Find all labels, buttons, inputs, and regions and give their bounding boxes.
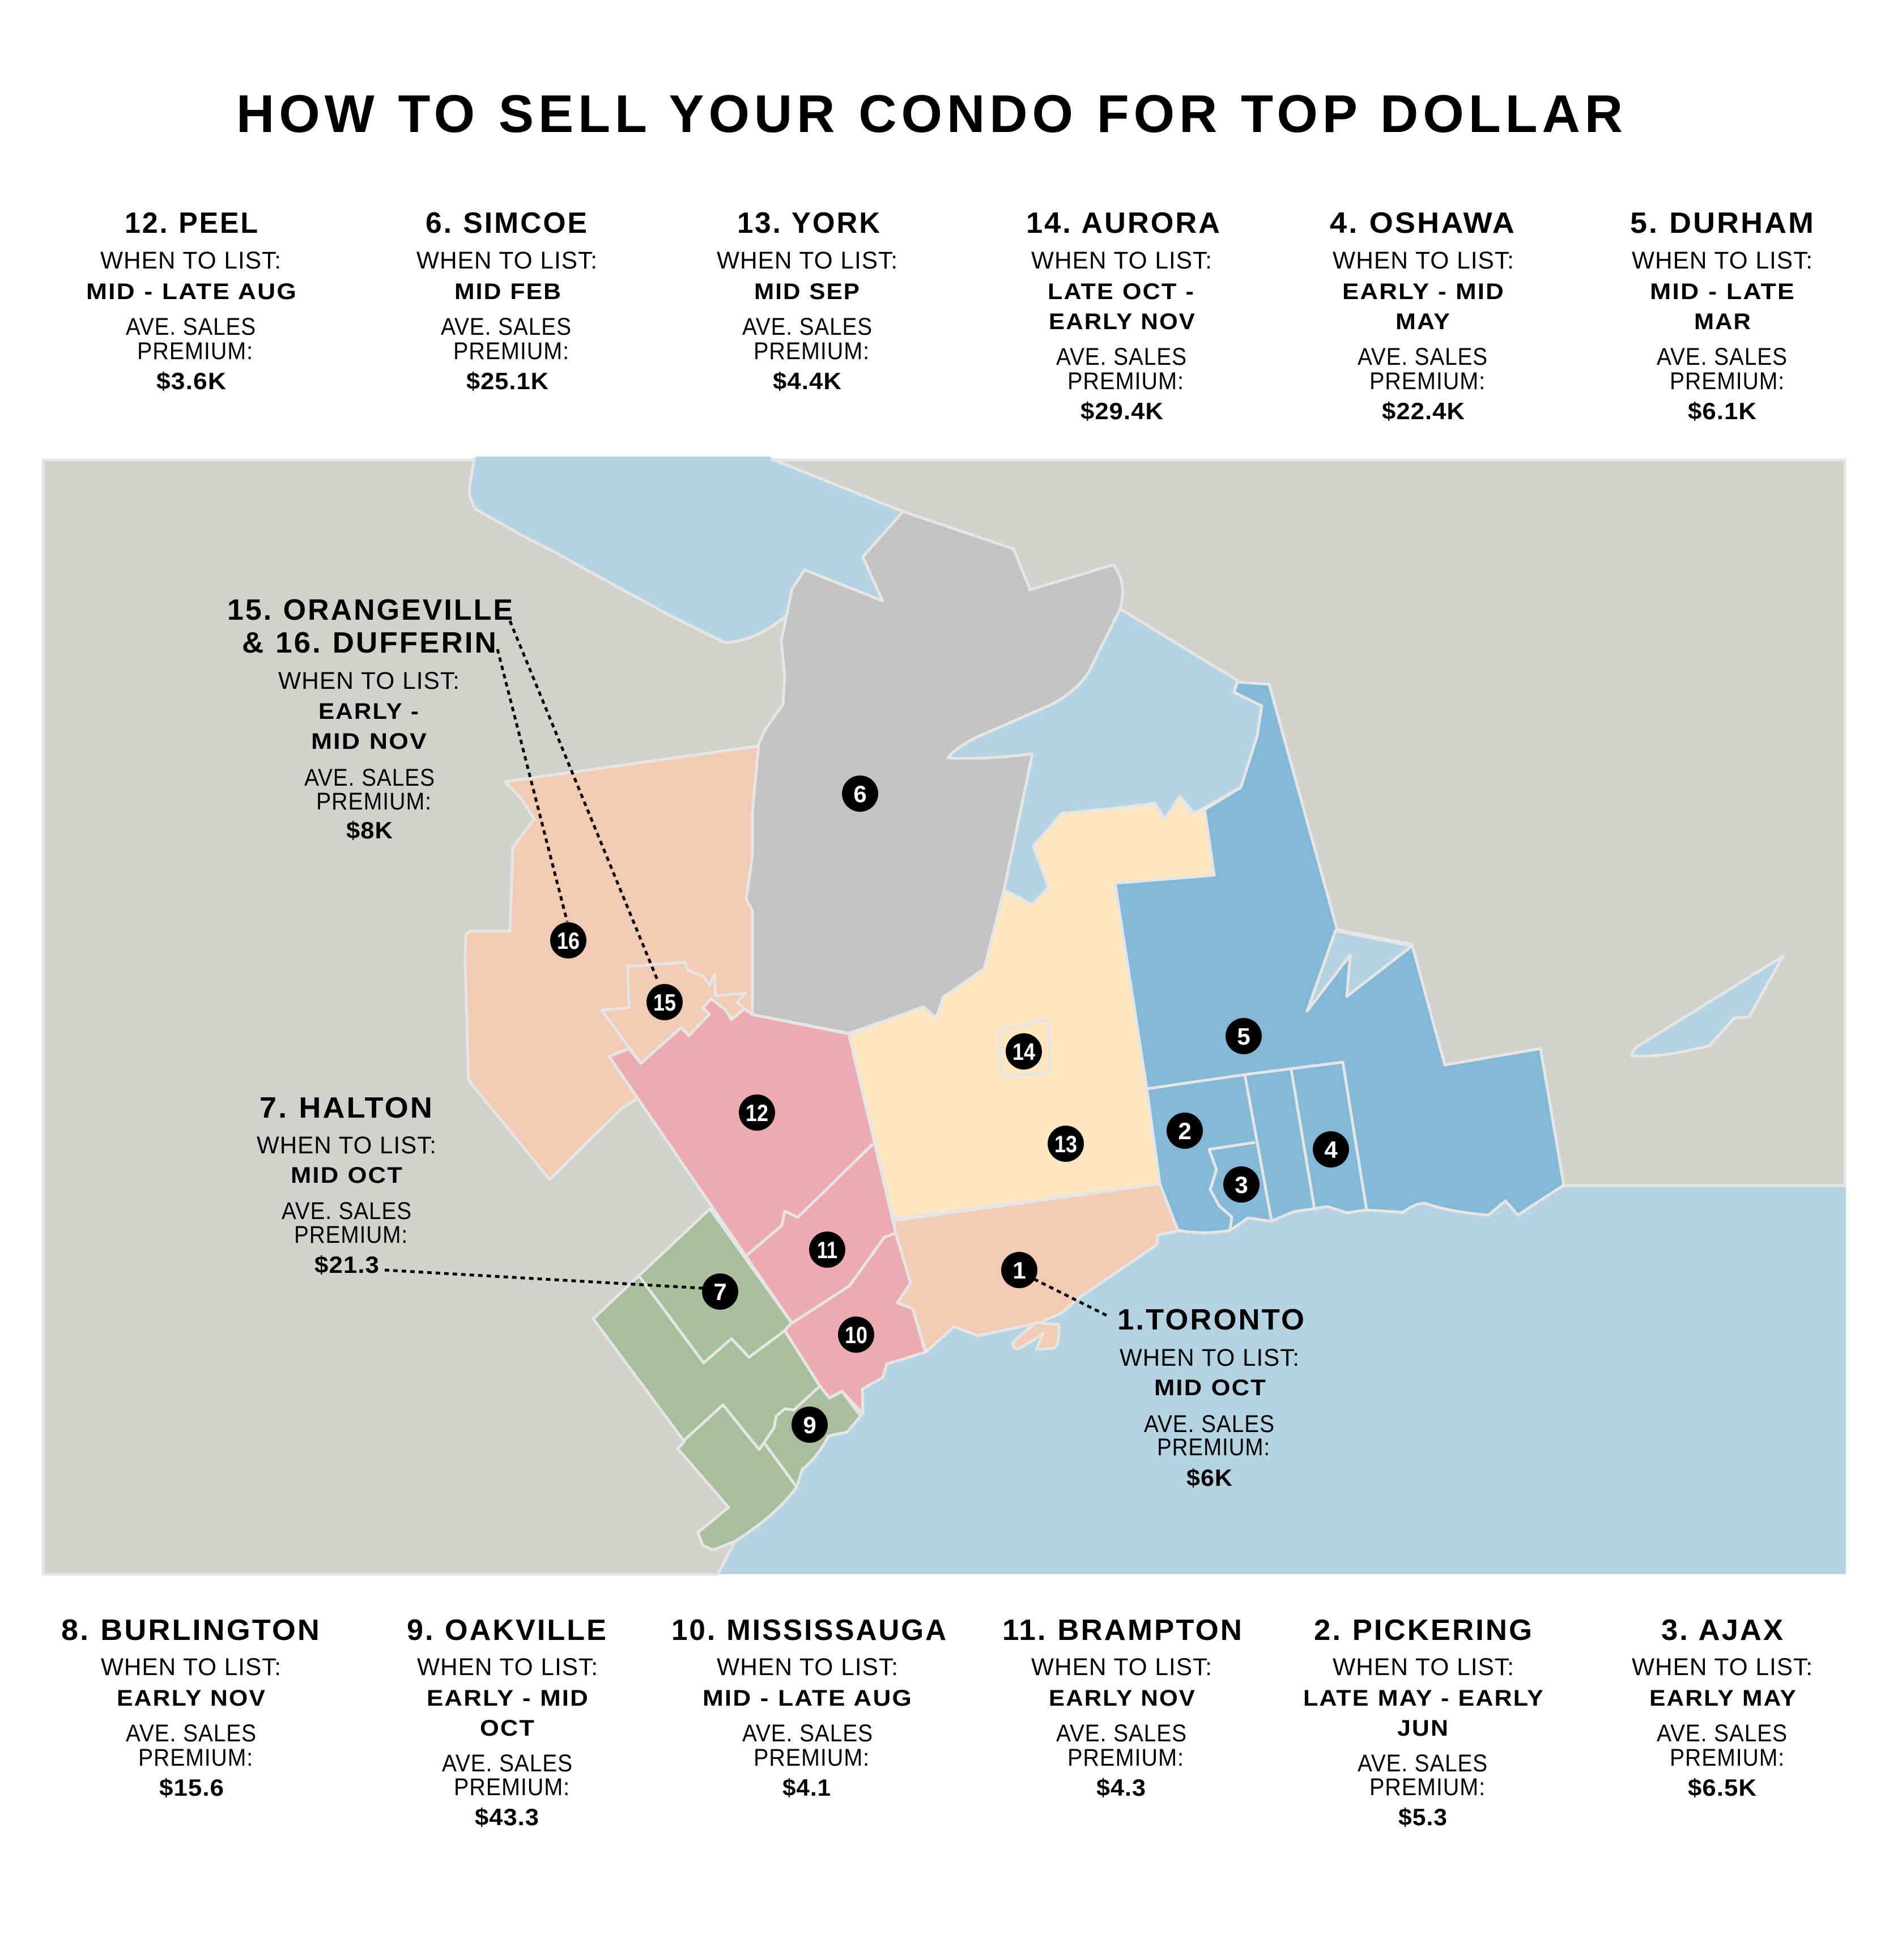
marker 6 [842, 776, 878, 812]
region: dufferin [465, 746, 759, 1179]
block: 10. mississauga: 10. MISSISSAUGA [671, 1614, 948, 1647]
title: HOW TO SELL YOUR CONDO FOR TOP DOLLAR [236, 84, 1627, 143]
block: 9. oakville: $43.3 [475, 1804, 539, 1830]
block: 10. mississauga: $4.1 [782, 1774, 831, 1801]
block: 2. pickering: LATE MAY - EARLY [1303, 1686, 1545, 1711]
map markers [550, 776, 1349, 1443]
callout: 1. toronto: 1.TORONTO [1117, 1303, 1306, 1336]
block: 11. brampton: PREMIUM: [1067, 1744, 1184, 1771]
block: 13. york: AVE. SALES [742, 313, 873, 340]
marker 5 [1226, 1018, 1262, 1054]
marker 10: 10 [845, 1322, 867, 1348]
callout: 7. halton: PREMIUM: [294, 1221, 408, 1249]
region: peel [609, 999, 925, 1414]
block: 2. pickering: $5.3 [1398, 1804, 1448, 1830]
leader line: halton [385, 1270, 703, 1288]
region: york [849, 796, 1214, 1219]
lake ontario water [42, 459, 1846, 1574]
municipal divisions in durham [1147, 1062, 1367, 1230]
block: 11. brampton: WHEN TO LIST: [1031, 1654, 1212, 1681]
block: 3. ajax: PREMIUM: [1670, 1744, 1785, 1771]
block: 6. simcoe: WHEN TO LIST: [416, 247, 598, 274]
block: 5. durham [1630, 207, 1815, 424]
callout: 7. halton: MID OCT [291, 1163, 403, 1188]
marker 7 [702, 1273, 738, 1310]
block: 12. peel [86, 207, 297, 394]
block: 3. ajax: 3. AJAX [1661, 1614, 1785, 1647]
callout: 15. orangeville and 16. dufferin: 15. ORANGEVILLE [227, 594, 514, 627]
marker 13: 13 [1054, 1131, 1077, 1157]
marker 2: 2 [1178, 1118, 1192, 1144]
marker 15: 15 [653, 989, 676, 1016]
block: 9. oakville [407, 1614, 608, 1830]
block: 4. oshawa: EARLY - MID [1342, 279, 1505, 304]
callout: 15. orangeville and 16. dufferin: & 16. DUFFERIN [242, 627, 498, 659]
peel divisions [746, 1145, 896, 1323]
block: 5. durham: WHEN TO LIST: [1632, 247, 1813, 274]
block: 8. burlington: WHEN TO LIST: [101, 1654, 282, 1681]
callout: 15. orangeville and 16. dufferin: EARLY - [318, 699, 420, 724]
marker 16 [550, 922, 586, 958]
block: 8. burlington: PREMIUM: [138, 1744, 253, 1771]
block: 4. oshawa: WHEN TO LIST: [1333, 247, 1514, 274]
block: 6. simcoe [416, 207, 598, 394]
region: aurora [999, 1020, 1050, 1077]
marker 4 [1313, 1131, 1349, 1168]
durham small lake [1307, 931, 1412, 1011]
halton divisions [640, 1277, 820, 1487]
callout: 1. toronto: MID OCT [1154, 1375, 1267, 1400]
georgian bay water [469, 459, 903, 642]
marker 3 [1223, 1166, 1260, 1203]
lake simcoe water [949, 609, 1262, 905]
region: durham [1115, 682, 1564, 1233]
block: 12. peel: 12. PEEL [125, 207, 259, 240]
callout: 1. toronto: AVE. SALES [1144, 1411, 1275, 1438]
block: 6. simcoe: 6. SIMCOE [426, 207, 589, 240]
block: 9. oakville: 9. OAKVILLE [407, 1614, 608, 1647]
surrounding land [43, 460, 1845, 1574]
marker 1 [1001, 1252, 1037, 1288]
block: 3. ajax: AVE. SALES [1657, 1720, 1788, 1747]
block: 14. aurora [1026, 207, 1222, 424]
block: 11. brampton: $4.3 [1096, 1774, 1146, 1801]
block: 14. aurora: EARLY NOV [1049, 309, 1196, 334]
leader line: orangeville [510, 621, 658, 982]
block: 12. peel: AVE. SALES [126, 313, 256, 340]
block: 6. simcoe: PREMIUM: [453, 338, 569, 365]
block: 12. peel: PREMIUM: [137, 338, 253, 365]
callout: 15. orangeville and 16. dufferin: WHEN TO LIST: [278, 667, 460, 694]
block: 2. pickering [1303, 1614, 1545, 1830]
block: 5. durham: AVE. SALES [1657, 343, 1788, 370]
georgian bay top edge mask [476, 457, 771, 461]
block: 8. burlington [61, 1614, 321, 1801]
callout: 7. halton: 7. HALTON [259, 1092, 434, 1124]
region: toronto [894, 1184, 1178, 1352]
callout: 7. halton: AVE. SALES [282, 1198, 412, 1225]
marker 9 [792, 1407, 828, 1443]
marker 13 [1048, 1126, 1084, 1162]
block: 8. burlington: 8. BURLINGTON [61, 1614, 321, 1647]
block: 5. durham: $6.1K [1688, 398, 1757, 424]
block: 10. mississauga: WHEN TO LIST: [717, 1654, 899, 1681]
block: 10. mississauga: AVE. SALES [742, 1720, 873, 1747]
marker 5: 5 [1237, 1023, 1250, 1050]
marker 11: 11 [817, 1237, 837, 1263]
block: 6. simcoe: $25.1K [466, 368, 549, 394]
marker 11 [809, 1232, 845, 1268]
block: 2. pickering: WHEN TO LIST: [1333, 1654, 1514, 1681]
block: 11. brampton: AVE. SALES [1056, 1720, 1187, 1747]
region: halton [593, 1209, 861, 1550]
block: 2. pickering: JUN [1397, 1716, 1449, 1741]
leader line: dufferin [497, 649, 567, 922]
block: 14. aurora: 14. AURORA [1026, 207, 1222, 240]
block: 5. durham: PREMIUM: [1670, 368, 1785, 395]
marker 9: 9 [803, 1412, 816, 1438]
block: 3. ajax: WHEN TO LIST: [1632, 1654, 1813, 1681]
callout: 15. orangeville and 16. dufferin: MID NOV [311, 729, 428, 754]
marker 16: 16 [557, 927, 580, 954]
callout: 1. toronto: PREMIUM: [1157, 1434, 1270, 1461]
toronto island [1012, 1323, 1059, 1349]
block: 11. brampton: EARLY NOV [1049, 1686, 1196, 1711]
block: 14. aurora: $29.4K [1080, 398, 1164, 424]
block: 9. oakville: EARLY - MID [427, 1686, 589, 1711]
block: 11. brampton: 11. BRAMPTON [1002, 1614, 1244, 1647]
block: 13. york: 13. YORK [737, 207, 882, 240]
block: 11. brampton [1002, 1614, 1244, 1801]
block: 12. peel: WHEN TO LIST: [100, 247, 282, 274]
block: 8. burlington: $15.6 [159, 1774, 224, 1801]
block: 6. simcoe: MID FEB [454, 279, 562, 304]
block: 5. durham: MID - LATE [1650, 279, 1796, 304]
orangeville boundary [602, 962, 746, 1063]
callout: 15. orangeville and 16. dufferin: AVE. SALES [304, 764, 435, 791]
block: 9. oakville: OCT [480, 1716, 535, 1741]
block: 13. york: MID SEP [754, 279, 861, 304]
marker 6: 6 [853, 781, 867, 807]
marker 7: 7 [713, 1279, 727, 1305]
callout: 7. halton: $21.3 [314, 1251, 380, 1278]
block: 14. aurora: AVE. SALES [1056, 343, 1187, 370]
durham east water [1632, 956, 1783, 1056]
leader line: toronto [1034, 1279, 1110, 1317]
marker 15 [646, 984, 683, 1020]
block: 2. pickering: AVE. SALES [1358, 1750, 1488, 1777]
block: 13. york: WHEN TO LIST: [717, 247, 898, 274]
block: 3. ajax [1632, 1614, 1813, 1801]
callout: 15. orangeville and 16. dufferin: PREMIUM: [316, 788, 432, 815]
block: 3. ajax: $6.5K [1688, 1774, 1757, 1801]
block: 4. oshawa: AVE. SALES [1358, 343, 1488, 370]
block: 9. oakville: PREMIUM: [454, 1774, 570, 1801]
block: 4. oshawa: MAY [1396, 309, 1451, 334]
block: 14. aurora: WHEN TO LIST: [1031, 247, 1212, 274]
callout: 1. toronto: $6K [1186, 1464, 1233, 1491]
block: 5. durham: 5. DURHAM [1630, 207, 1815, 240]
marker 2 [1167, 1113, 1203, 1149]
marker 10 [838, 1316, 874, 1353]
marker 4: 4 [1324, 1136, 1338, 1163]
block: 13. york: PREMIUM: [754, 338, 870, 365]
block: 10. mississauga [671, 1614, 948, 1801]
block: 4. oshawa: 4. OSHAWA [1330, 207, 1516, 240]
block: 14. aurora: PREMIUM: [1067, 368, 1184, 395]
callout: 7. halton [257, 1092, 437, 1278]
block: 12. peel: MID - LATE AUG [86, 279, 297, 304]
map [42, 457, 1846, 1574]
block: 6. simcoe: AVE. SALES [441, 313, 572, 340]
callout: 1. toronto [1117, 1303, 1306, 1491]
block: 14. aurora: LATE OCT - [1048, 279, 1195, 304]
marker 1: 1 [1012, 1257, 1026, 1284]
marker 14 [1006, 1033, 1042, 1070]
block: 8. burlington: AVE. SALES [126, 1720, 257, 1747]
block: 9. oakville: WHEN TO LIST: [417, 1654, 598, 1681]
block: 9. oakville: AVE. SALES [442, 1750, 573, 1777]
marker 14: 14 [1012, 1038, 1036, 1065]
block: 10. mississauga: MID - LATE AUG [703, 1686, 913, 1711]
marker 12: 12 [746, 1100, 768, 1126]
block: 13. york [717, 207, 898, 394]
callout: 7. halton: WHEN TO LIST: [257, 1132, 437, 1159]
block: 13. york: $4.4K [773, 368, 842, 394]
callout: 1. toronto: WHEN TO LIST: [1120, 1344, 1300, 1371]
marker 12 [739, 1094, 775, 1131]
block: 10. mississauga: PREMIUM: [754, 1744, 870, 1771]
marker 3: 3 [1235, 1171, 1248, 1198]
callout: 15. orangeville and 16. dufferin [227, 594, 514, 843]
block: 5. durham: MAR [1694, 309, 1752, 334]
block: 3. ajax: EARLY MAY [1649, 1686, 1797, 1711]
block: 2. pickering: PREMIUM: [1369, 1774, 1486, 1801]
block: 4. oshawa [1330, 207, 1516, 424]
block: 4. oshawa: PREMIUM: [1369, 368, 1486, 395]
block: 4. oshawa: $22.4K [1382, 398, 1465, 424]
block: 2. pickering: 2. PICKERING [1314, 1614, 1534, 1647]
region: simcoe [746, 512, 1122, 1033]
block: 12. peel: $3.6K [156, 368, 227, 394]
callout: 15. orangeville and 16. dufferin: $8K [346, 817, 393, 843]
block: 8. burlington: EARLY NOV [117, 1686, 266, 1711]
